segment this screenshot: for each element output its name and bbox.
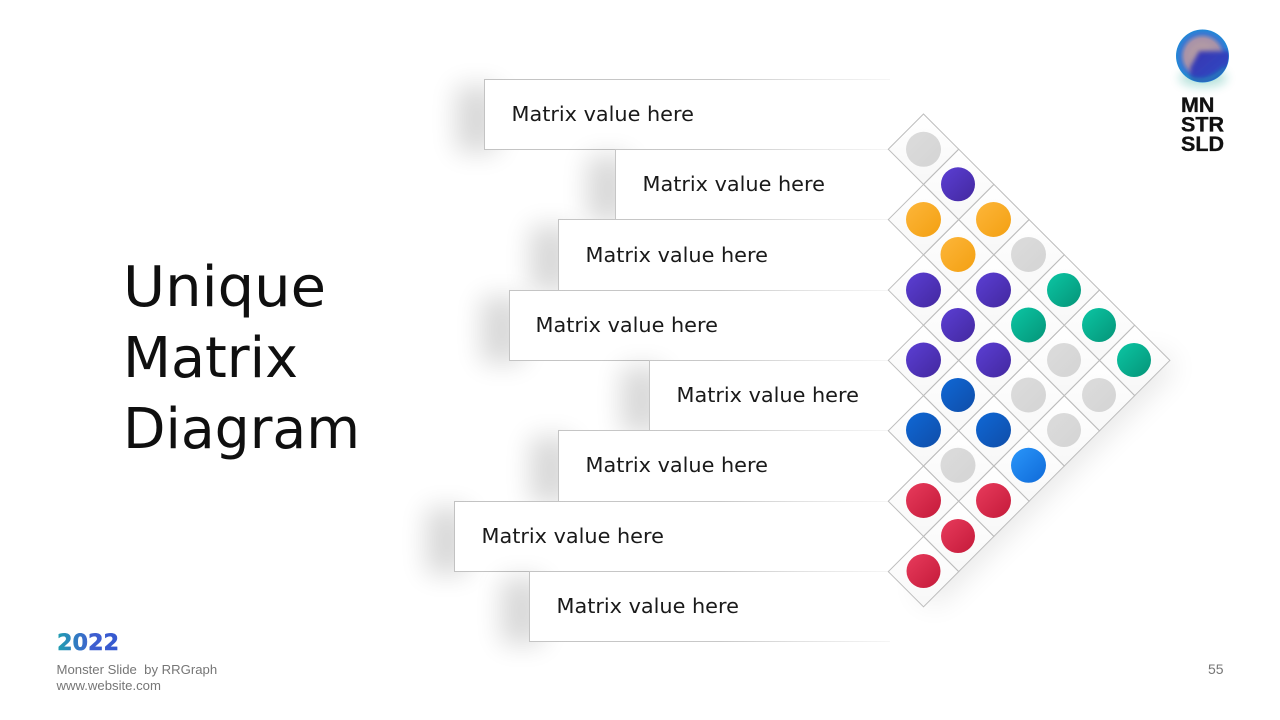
page number: 55 [1208, 661, 1224, 677]
footer: credits: Monster Slide by RRGraph [56, 662, 217, 677]
title: Matrix [123, 326, 298, 391]
logo wordmark: MN [1181, 93, 1214, 117]
logo wordmark [1181, 93, 1224, 156]
bar 8: Matrix value here [556, 594, 739, 618]
matrix cell backgrounds [888, 114, 1170, 607]
matrix cell outlines [888, 114, 1170, 607]
logo wordmark: SLD [1181, 132, 1224, 156]
bar 7: Matrix value here [482, 524, 664, 548]
bar 1 [456, 80, 894, 152]
title: Diagram [123, 397, 360, 462]
bar 4 [481, 290, 895, 363]
title [123, 255, 360, 462]
footer: credits [56, 662, 217, 693]
bar 2 [587, 150, 895, 222]
bar 3 [530, 220, 895, 292]
bar 4: Matrix value here [536, 313, 718, 337]
bar 6: Matrix value here [586, 453, 768, 477]
footer: credits: www.website.com [56, 678, 161, 693]
diamond matrix [888, 114, 1176, 607]
bar 2: Matrix value here [642, 172, 825, 196]
logo sphere [1176, 30, 1232, 87]
footer: year: 2022 [57, 630, 119, 656]
logo [1176, 30, 1232, 156]
matrix dots [906, 132, 1151, 588]
bar 6 [530, 430, 895, 503]
logo wordmark: STR [1181, 112, 1224, 136]
bar 3: Matrix value here [586, 243, 768, 267]
list of matrix value bars [426, 80, 895, 644]
title: Unique [123, 255, 326, 320]
matrix drop shadow [915, 350, 1176, 606]
bar 1: Matrix value here [512, 102, 694, 126]
bar 5: Matrix value here [676, 383, 859, 407]
bar 8 [501, 572, 895, 644]
bar 5 [621, 360, 895, 433]
bar 7 [426, 502, 895, 574]
